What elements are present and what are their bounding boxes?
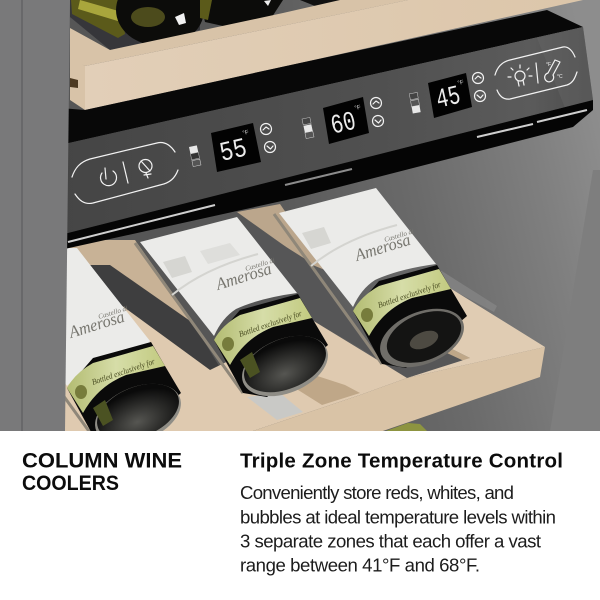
top shelf [70, 0, 583, 110]
photo: wine cooler interior [0, 0, 600, 456]
bottle: right [274, 188, 473, 379]
lip highlight strips [68, 110, 587, 242]
icon: thermometer [545, 60, 563, 82]
zone 3 buttons [472, 72, 486, 102]
clear shelf edge [437, 268, 497, 312]
display: 60: 60 [328, 108, 359, 143]
bottle: left: Castello di [97, 304, 129, 321]
icon: light with rays [508, 65, 532, 86]
heading: product type: COOLERS [22, 472, 119, 495]
lower shelf front rail [250, 347, 545, 432]
bottle: middle: Bottled exclusively for [237, 308, 304, 339]
body text: Conveniently store reds, whites, and [240, 482, 514, 503]
bottle: middle: Castello di [244, 256, 276, 273]
left capsule: power and light [72, 143, 178, 203]
bottle: right: Amerosa [352, 230, 413, 265]
icon: light off [139, 160, 152, 178]
bottle: right: Bottled exclusively for [376, 279, 443, 310]
cabinet side frame [0, 0, 70, 431]
heading: product type [22, 450, 182, 495]
icon: thermometer: °F [546, 62, 551, 68]
right capsule: light and temperature unit [495, 47, 577, 99]
heading: product type: COLUMN WINE [22, 450, 182, 473]
zone 1 buttons [260, 124, 276, 152]
icon: power [101, 168, 117, 186]
display: 45: °F [457, 80, 465, 87]
display: 55 [211, 123, 261, 172]
bottle: left: Bottled exclusively for [90, 356, 157, 387]
lower shelf rear wood [60, 204, 545, 432]
display: 60: °F [354, 105, 362, 112]
small label below middle bottle [247, 393, 303, 420]
body text [240, 482, 556, 576]
visor [60, 10, 583, 145]
top shelf bottles [70, 0, 345, 50]
panel face [60, 27, 593, 235]
zone 3 indicator [409, 92, 421, 114]
wall corner strip [586, 170, 600, 278]
glass reflection [564, 28, 593, 106]
zone 2 indicator [302, 117, 314, 139]
bottle: left: Amerosa [66, 307, 127, 342]
lower lip [60, 100, 593, 250]
display: 55: 55 [217, 135, 250, 170]
control panel [60, 10, 593, 250]
body text: 3 separate zones that each offer a vast [240, 530, 542, 551]
zone 2 buttons [370, 98, 384, 126]
bottle: middle: Amerosa [213, 259, 274, 294]
body text: range between 41°F and 68°F. [240, 555, 480, 576]
icon: thermometer: °C [557, 74, 563, 80]
bottle: right: Castello di [383, 227, 415, 244]
display: 45: 45 [434, 82, 464, 116]
heading: feature title: Triple Zone Temperature Control [240, 450, 563, 473]
zone 1 indicator [189, 145, 201, 167]
display: 60 [323, 97, 369, 144]
display: 55: °F [242, 130, 250, 137]
bottle: left [65, 248, 181, 431]
green label on lower shelf bottle [386, 423, 427, 431]
back wall [60, 0, 600, 431]
body text: bubbles at ideal temperature levels within [240, 506, 556, 527]
bottle: middle [135, 217, 337, 408]
